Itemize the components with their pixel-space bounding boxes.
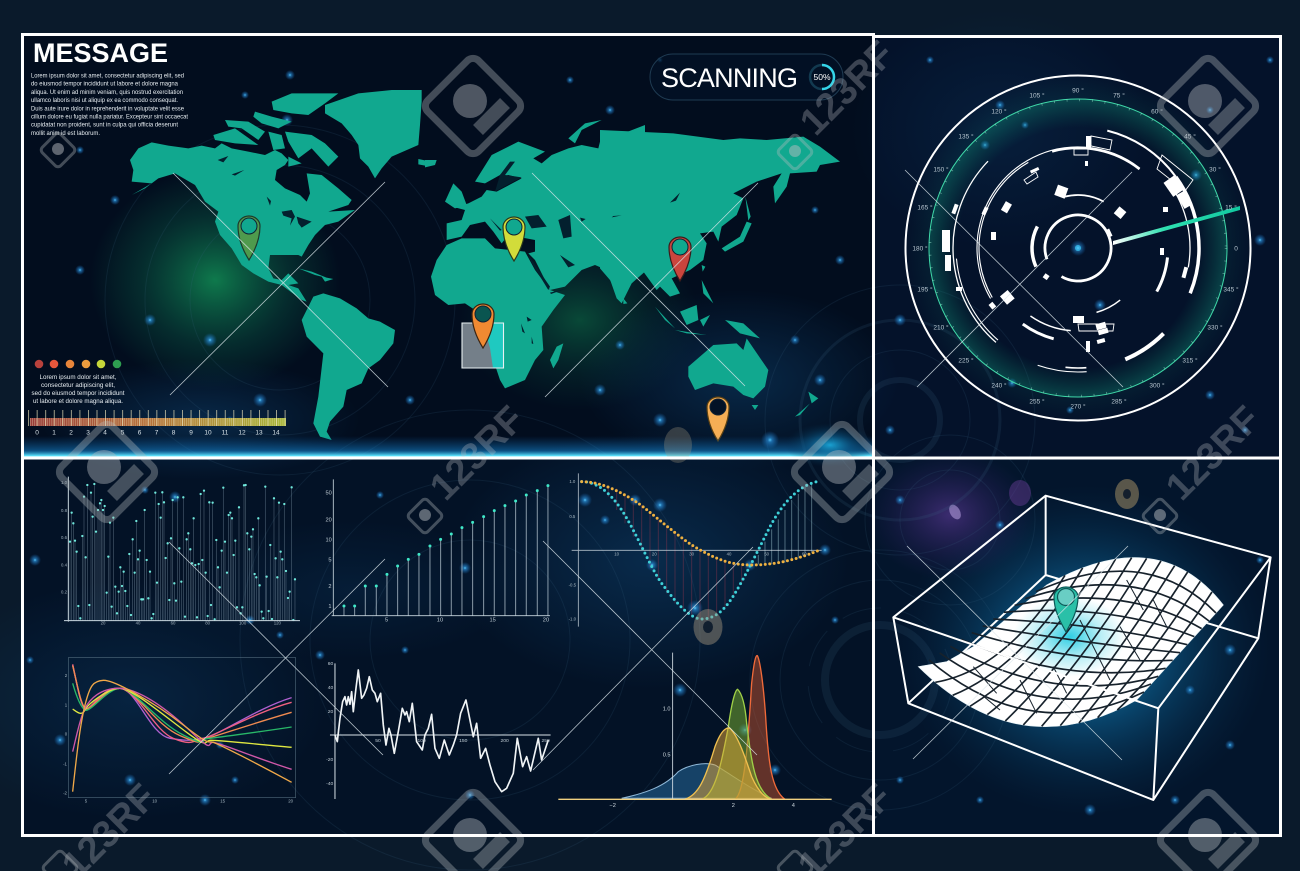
chart: stem scatter plot: 0.8 [61,508,68,513]
legend text: ut labore et dolore magna aliqua. [33,398,123,405]
radar: degree labels: 105 ° [1029,92,1045,100]
chart: stem scatter plot: 0.2 [61,590,68,595]
ruler scale 0 to 14: 5 [121,430,125,436]
chart: random walk line: -20 [326,757,334,763]
legend: colored dots [35,360,121,368]
chart: dotted wave comparison: 0.5 [569,514,576,519]
chart: log scale stem plot: 2 [328,584,332,590]
legend text [32,374,125,405]
radar: degree labels: 345 ° [1223,286,1239,294]
radar: degree labels: 120 ° [991,108,1007,116]
map: eastern Asia and Oceania [600,130,840,417]
chart: random walk line: -40 [326,781,334,787]
map pin: green [238,216,260,260]
chart: stem scatter plot: 60 [171,620,176,625]
radar: degree labels: 255 ° [1029,398,1045,406]
radar: degree labels: 180 ° [912,244,928,252]
scanning status pill [650,54,843,100]
chart: polynomial curve fits: 20 [288,798,294,803]
chart: dotted wave comparison: 10 [614,551,620,556]
radar: degree labels: 30 ° [1209,166,1221,174]
radar: degree labels: 150 ° [933,166,949,174]
ruler scale 0 to 14: 11 [222,430,229,436]
ruler scale 0 to 14: 0 [35,430,39,436]
chart: random walk line: 20 [328,709,334,715]
radar: degree labels: 15 ° [1225,204,1237,212]
text block: message body: mollit anim id est laborum. [31,130,100,137]
chart: polynomial curve fits [63,658,296,803]
radar: degree labels: 330 ° [1207,324,1223,332]
radar: degree labels: 210 ° [933,324,949,332]
text block: message body [31,72,188,137]
chart: dotted wave comparison: 30 [689,551,695,556]
chart: log scale stem plot: 10 [437,618,443,624]
chart: polynomial curve fits: 2 [65,673,68,678]
title: MESSAGE [33,38,168,68]
chart: log scale stem plot: 1 [328,604,332,610]
chart: log scale stem plot: 20 [325,517,332,523]
panel: world map [130,90,840,441]
chart: random walk line: 150 [459,738,468,744]
chart: stem scatter plot: 1.0 [61,480,68,485]
chart: stem scatter plot: 0.6 [61,535,68,540]
map pin: red [669,237,691,281]
chart: random walk line: 40 [328,685,334,691]
legend text: consectetur adipiscing elit, [41,382,115,389]
map pin: light orange [707,397,729,441]
radar: degree labels [912,86,1239,410]
3D surface wireframe box: back edges [908,496,1258,703]
ruler scale 0 to 14: 1 [52,430,56,436]
radar: degree labels: 315 ° [1182,356,1198,364]
chart: density curves: 4 [792,803,795,809]
text block: message body: Lorem ipsum dolor sit amet, consectetur adipiscing elit, sed [31,72,184,80]
ruler scale 0 to 14: 7 [155,430,159,436]
ruler scale 0 to 14: 8 [172,430,176,436]
chart: dotted wave comparison: 50 [764,551,770,556]
chart: polynomial curve fits: 15 [220,798,226,803]
scanning status pill: SCANNING [661,63,798,93]
3D surface mesh [918,558,1223,727]
chart: polynomial curve fits: 5 [85,798,88,803]
radar: degree labels: 195 ° [917,286,933,294]
ruler scale 0 to 14: 13 [255,430,263,436]
ruler scale 0 to 14: 2 [69,430,73,436]
chart: density curves: 1.0 [663,706,671,712]
chart: dotted wave comparison: 20 [652,551,657,556]
watermarks: 123RF [792,33,903,144]
map: South America [302,293,395,440]
radar: degree labels: 240 ° [991,382,1007,390]
map: inland lakes of North America [218,156,312,228]
chart: stem scatter plot [61,477,300,625]
radar: degree labels: 0 [1234,246,1238,252]
chart: density curves [558,653,832,809]
chart: stem scatter plot: 80 [205,620,211,625]
chart: dotted wave comparison: 60 [802,551,807,556]
ruler scale 0 to 14 [28,418,286,436]
chart: log scale stem plot: 50 [325,491,332,497]
text block: message body: aliqua. Ut enim ad minim veniam, quis nostrud exercitation [31,89,183,96]
3D surface wireframe box: front edges [893,496,1271,800]
chart: log scale stem plot: 20 [543,618,549,624]
diagonal cross lines [169,170,1132,774]
chart: stem scatter plot: 0.4 [61,562,68,567]
text block: message body: do eiusmod tempor incididunt ut labore et dolore magna [31,80,178,88]
map marker: selection square [462,323,504,368]
map: Europe, Africa and western Asia [425,120,645,388]
chart: polynomial curve fits: 10 [152,798,158,803]
ruler scale 0 to 14: 3 [86,430,90,436]
chart: log scale stem plot: 5 [328,557,332,563]
chart: dotted wave comparison: 40 [727,551,732,556]
ruler scale 0 to 14: 6 [138,430,142,436]
chart: stem scatter plot: 40 [136,620,141,625]
chart: dotted wave comparison: -0.5 [569,582,577,587]
ruler scale 0 to 14: 9 [189,430,193,436]
watermarks: 123RF [422,398,533,509]
radar: degree labels: 165 ° [917,204,933,212]
map: inland seas [490,162,622,344]
legend text: sed do eiusmod tempor incididunt [32,390,125,397]
chart: polynomial curve fits: 0 [65,732,68,737]
ruler scale 0 to 14: 4 [103,430,107,436]
ruler scale 0 to 14: 10 [204,430,212,436]
chart: polynomial curve fits: -1 [63,761,68,766]
chart: polynomial curve fits: 1 [65,702,68,707]
radar: degree labels: 135 ° [958,132,974,140]
text block: message body: cupidatat non proident, sunt in culpa qui officia deserunt [31,122,178,128]
radar: degree labels: 90 ° [1072,86,1084,94]
radar: degree labels: 285 ° [1111,398,1127,406]
chart: dotted wave comparison: 1.0 [569,479,576,484]
chart: log scale stem plot: 15 [489,618,496,624]
scanning status pill: 50% [813,72,831,82]
ruler scale 0 to 14: 12 [238,430,246,436]
chart: polynomial curve fits: -2 [63,791,68,796]
map: North America and Greenland [130,90,425,302]
chart: random walk line: 100 [417,738,426,744]
chart: density curves: −2 [609,803,616,809]
lens flares [664,427,1139,645]
chart: density curves: 2 [732,803,735,809]
horizon glow [24,423,875,467]
chart: dotted wave comparison: -1.0 [569,617,577,622]
radar: degree labels: 270 ° [1070,402,1086,410]
chart: random walk line [326,661,551,799]
chart: random walk line: 60 [328,661,334,667]
chart: random walk line: 200 [500,738,509,744]
map pin: orange [472,304,494,348]
chart: log scale stem plot: 10 [325,537,332,543]
radar: degree labels: 225 ° [958,356,974,364]
chart: log scale stem plot [325,479,550,624]
text block: message body: cillum dolore eu fugiat nulla pariatur. Excepteur sint occaecat [31,114,188,120]
ruler scale 0 to 14: 14 [272,430,280,436]
chart: dotted wave comparison [569,473,822,627]
map pin: teal on surface [1054,587,1078,632]
chart: stem scatter plot: 100 [239,620,247,625]
radar: solid blocks [942,136,1191,352]
radar: degree labels: 300 ° [1149,382,1165,390]
legend text: Lorem ipsum dolor sit amet, [40,374,117,381]
radar: degree labels: 60 ° [1151,108,1163,116]
map pin: yellow [503,217,525,261]
chart: random walk line: 250 [541,738,550,744]
chart: log scale stem plot: 5 [385,618,388,624]
text block: message body: ullamco laboris nisi ut aliquip ex ea commodo consequat. [31,97,178,104]
radar: degree labels: 75 ° [1113,92,1125,100]
chart: stem scatter plot: 20 [101,620,106,625]
radar: arc segments [902,72,1254,424]
watermarks: 123RF [1158,398,1269,509]
text block: message body: Duis aute irure dolor in reprehenderit in voluptate velit esse [31,106,184,112]
chart: random walk line: 50 [375,738,381,744]
radar: degree labels: 45 ° [1184,132,1196,140]
chart: density curves: 0.5 [663,752,671,758]
chart: stem scatter plot: 120 [274,620,282,625]
radar: sweep beam [1113,206,1240,245]
radar: glow and rings [906,76,1250,420]
